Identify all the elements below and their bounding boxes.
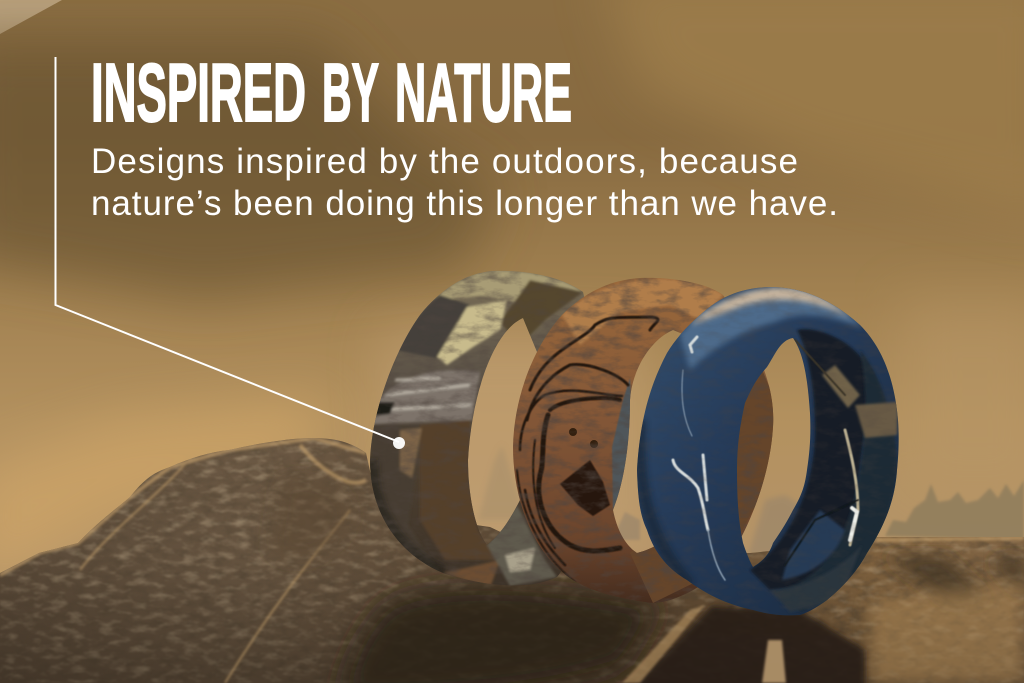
burl knot	[560, 460, 610, 516]
inner wall strip	[612, 378, 632, 510]
lit crown	[680, 289, 862, 370]
ring: burled wood	[513, 278, 774, 603]
outer right band	[796, 352, 898, 611]
brown lower bark	[420, 420, 500, 560]
marble veins	[690, 337, 697, 352]
grey layered bark	[372, 370, 480, 424]
wood grain	[517, 317, 658, 582]
cream leaf patch	[437, 300, 507, 365]
title: NATURE	[395, 46, 572, 139]
ring: blue marble	[630, 280, 905, 620]
ring: camouflage	[370, 271, 584, 586]
callout leader line	[56, 57, 405, 449]
subtitle text	[91, 142, 838, 223]
subtitle text: nature’s been doing this longer than we have.	[91, 184, 838, 223]
inner wall	[750, 329, 875, 590]
ring shadows on rock	[340, 586, 660, 683]
edge shading	[370, 460, 443, 573]
title: BY	[322, 46, 379, 139]
subtitle text: Designs inspired by the outdoors, because	[91, 142, 798, 181]
callout dot	[393, 437, 405, 449]
back band lower	[487, 505, 557, 586]
top band	[437, 271, 582, 304]
title: INSPIRED	[91, 46, 306, 139]
left edge shade	[639, 420, 690, 585]
camo patches	[822, 365, 860, 408]
rock lit ridges	[0, 438, 1024, 683]
distant trees	[885, 480, 1024, 540]
rock foreground	[0, 430, 1024, 683]
back band	[633, 372, 774, 603]
